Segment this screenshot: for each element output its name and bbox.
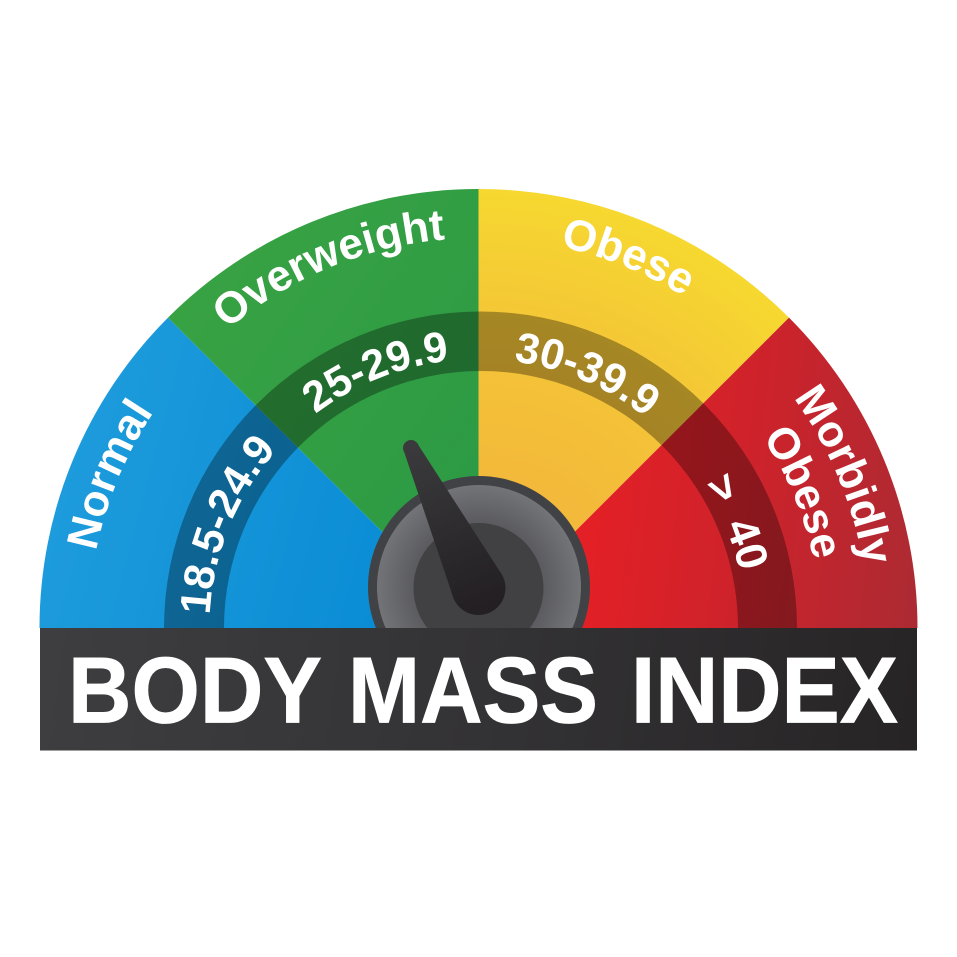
- title: INDEX: [631, 638, 898, 742]
- gauge hub: [368, 476, 590, 698]
- sector: overweight: [168, 189, 478, 628]
- label: Overweight: Overweight: [215, 211, 445, 323]
- range: 18.5-24.9: 18.5-24.9: [181, 436, 272, 612]
- label: Obese: Obese: [564, 220, 691, 293]
- label: Normal: Normal: [67, 397, 152, 548]
- sector: normal: [39, 318, 478, 628]
- range: 30-39.9: 30-39.9: [516, 333, 658, 413]
- title: BODY: [68, 638, 322, 742]
- dark range band: [164, 312, 797, 628]
- label: Obese (second line): Obese: [768, 428, 835, 558]
- title: MASS: [348, 638, 598, 742]
- range: > 40: > 40: [707, 472, 767, 568]
- needle: [403, 440, 506, 615]
- sector: obese: [478, 189, 789, 628]
- title bar: [40, 628, 917, 750]
- sector: morbidly obese: [478, 318, 918, 628]
- panel: gauge sectors: [39, 189, 917, 628]
- range: 25-29.9: 25-29.9: [303, 332, 446, 413]
- label: Morbidly: Morbidly: [795, 383, 890, 561]
